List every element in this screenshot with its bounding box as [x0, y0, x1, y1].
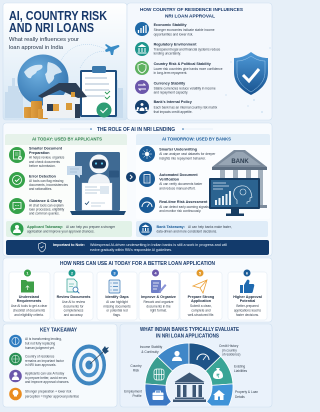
item: country risk and political stability	[135, 61, 223, 75]
label: existing liabilities: Liabilities	[234, 369, 248, 373]
icon: country globe	[154, 369, 164, 380]
step 2: review documents: and accuracy.	[64, 313, 83, 317]
item: guidance and clarity: Guidance & Clarity	[29, 199, 63, 203]
icon: briefcase	[152, 391, 164, 400]
item: country risk and political stability: in long-term repayment.	[154, 71, 187, 75]
label: credit history: (in country	[222, 348, 237, 352]
item: automated document verification: and reduce manual effort.	[159, 186, 196, 190]
step 1: understand requirements: Requirements	[17, 299, 41, 303]
step 6: higher approval potential: applications lead to	[234, 308, 261, 312]
item: automated document verification: AI can verify documents faster	[159, 182, 203, 186]
title: AND NRI LOANS	[9, 21, 94, 35]
label: country risk: Risk	[133, 368, 140, 372]
icon: credit gauge	[197, 354, 209, 360]
label: property and loan details: Property & Loan	[235, 390, 258, 394]
step 5: prepare strong application: Application	[191, 299, 212, 303]
takeaway: stronger preparation	[9, 388, 79, 400]
callout: important to note: Widespread AI-driven underwriting in Indian banks is still a work in progress and will	[90, 243, 227, 247]
takeaway: AI is transforming lending: AI is transforming lending,	[25, 337, 62, 341]
takeaway: applicants can use AI: to prepare better, avoid errors	[25, 376, 67, 380]
icon: airplane and flight path	[60, 44, 119, 68]
takeaway: country of residence: remains an important factor	[25, 359, 65, 363]
heading: WHAT INDIAN BANKS TYPICALLY EVALUATE	[140, 327, 239, 333]
step 5: prepare strong application: well-structured file.	[188, 313, 214, 317]
item: smarter underwriting: Smarter Underwriting	[159, 147, 197, 151]
heading: HOW NRIS CAN USE AI TODAY FOR A BETTER LOAN APPLICATION	[60, 261, 215, 267]
item: guidance and clarity	[9, 198, 65, 216]
step 3: identify gaps: AI can highlight	[106, 300, 128, 304]
icon: target with arrow	[72, 344, 109, 386]
item: economic stability: Economic Stability	[154, 23, 188, 27]
icon: income person	[172, 351, 182, 361]
item: guidance and clarity: loan processes, eligibility	[29, 208, 65, 212]
step 5: prepare strong application: Submit a clean,	[190, 304, 212, 308]
step 6: higher approval potential: Higher Approval	[233, 295, 262, 299]
title: AI, COUNTRY RISK	[9, 9, 107, 23]
subtitle: What really influences your	[9, 37, 79, 43]
item: smarter document preparation: and check documents	[29, 160, 60, 164]
item: smarter underwriting: AI can analyze vast datasets for deeper	[159, 152, 216, 156]
label: property and loan details: Details	[235, 395, 245, 399]
item: error detection: AI tools can flag missing	[29, 179, 64, 183]
step 6: higher approval potential	[228, 270, 267, 320]
step 4: improve and organize: Rework and organize	[143, 300, 174, 304]
subheading: AI TOMORROW: USED BY BANKS	[162, 136, 232, 142]
callout: bank takeaway: Bank Takeaway:	[156, 225, 185, 229]
step 1: understand requirements: Understand	[19, 295, 40, 299]
icon: house	[213, 390, 225, 400]
item: bank internal policy: Each bank has an internal country risk matrix	[154, 106, 218, 110]
label: income stability: & Continuity	[141, 350, 159, 354]
item: smarter underwriting: insights into repayment behavior.	[159, 156, 206, 160]
step 6: higher approval potential: Better-prepared	[236, 304, 259, 308]
takeaway: country of residence: Country of residence	[25, 354, 55, 358]
icon: bank with AI monitor: BANK	[231, 159, 249, 165]
item: error detection: and rationalities.	[29, 187, 52, 191]
step 2: review documents: Use AI to review	[62, 300, 86, 304]
label: income stability	[140, 345, 163, 354]
title	[9, 9, 107, 35]
item: country risk and political stability: Country Risk & Political Stability	[154, 62, 212, 66]
item: economic stability: opportunities and lower risk.	[154, 32, 193, 36]
step 4: improve and organize: 4	[154, 270, 157, 276]
step 3: identify gaps: Identify Gaps	[105, 295, 129, 299]
step 2: review documents	[54, 270, 93, 320]
step 4: improve and organize: Improve & Organize	[141, 295, 176, 299]
item: real-time risk assessment	[139, 197, 209, 213]
step 5: prepare strong application	[180, 270, 222, 320]
subtitle: loan approval in India	[9, 45, 63, 51]
item: real-time risk assessment: AI can detect early-warning signals	[159, 205, 209, 209]
subheading: AI TODAY: USED BY APPLICANTS	[32, 136, 103, 142]
callout: important to note: Important to Note:	[53, 243, 85, 247]
icon: shield with check	[226, 48, 270, 113]
step 1: understand requirements: and eligibility criteria.	[14, 313, 44, 317]
item: bank internal policy	[135, 100, 218, 114]
item: currency stability: and repayment capacity.	[154, 90, 188, 94]
takeaway: AI is transforming lending: human judgment yet.	[25, 346, 55, 350]
label: employment profile: Employment	[124, 390, 142, 394]
step 2: review documents: Review Documents	[57, 295, 90, 299]
callout: bank takeaway	[136, 221, 268, 237]
heading	[140, 327, 239, 339]
step 4: improve and organize: right format.	[150, 308, 167, 312]
item: automated document verification	[139, 171, 203, 190]
takeaway: applicants can use AI: Applicants can use AI today	[25, 372, 65, 376]
panel: what Indian banks typically evaluate	[120, 324, 272, 412]
callout: bank takeaway: AI can help banks make faster,	[188, 225, 232, 229]
callout: applicant takeaway: Applicant Takeaway:	[27, 225, 63, 229]
callout: bank takeaway: data-driven and more consistent decisions.	[156, 230, 217, 234]
label: existing liabilities: Existing	[234, 364, 245, 368]
item: regulatory environment	[135, 42, 221, 56]
label: existing liabilities	[234, 364, 248, 373]
heading: IN NRI LOAN APPLICATIONS	[156, 333, 219, 339]
label: country risk: Country	[130, 364, 142, 368]
item: smarter document preparation: Smarter Document	[29, 146, 63, 150]
item: regulatory environment: lending uncertainty.	[154, 52, 181, 56]
step 5: prepare strong application: 5	[199, 270, 202, 276]
label: credit history: of residence)	[222, 352, 240, 356]
step 6: higher approval potential: faster decisions.	[236, 313, 259, 317]
item: error detection: documents, inconsistencies	[29, 183, 68, 187]
icon: house	[38, 83, 87, 118]
item: smarter document preparation: before submission.	[29, 164, 56, 168]
item: country risk and political stability: Lower risk countries give banks more confidence	[154, 67, 223, 71]
item: smarter underwriting	[139, 146, 216, 162]
item: error detection: Error Detection	[29, 174, 57, 178]
callout: applicant takeaway: application and improve your approval chances.	[27, 230, 95, 234]
item: guidance and clarity: AI chat tools can explain	[29, 204, 64, 208]
takeaway: applicants can use AI	[9, 370, 69, 384]
step 3: identify gaps: flags.	[113, 313, 121, 317]
panel: AI tomorrow used by banks	[136, 134, 270, 219]
item: real-time risk assessment: Real-time Risk Assessment	[159, 200, 208, 204]
step 1: understand requirements: Use AI tools to get a clear	[11, 304, 48, 308]
icon: money bag: ₹	[216, 374, 220, 380]
step 1: understand requirements: 1	[26, 270, 29, 276]
heading	[140, 7, 243, 18]
item: economic stability: Stronger economies indicate stable income	[154, 28, 215, 32]
callout: applicant takeaway	[6, 221, 132, 237]
panel: how NRIs can use AI today	[3, 258, 272, 322]
panel: hero title	[3, 3, 127, 120]
step 6: higher approval potential: 6	[246, 270, 249, 276]
panel: how country of residence influences approval	[127, 3, 272, 120]
takeaway: country of residence	[9, 353, 65, 367]
callout: important to note	[6, 240, 269, 255]
item: economic stability	[135, 22, 215, 36]
label: credit history	[219, 344, 240, 356]
item: smarter document preparation: Preparation	[29, 151, 50, 155]
panel: AI today used by applicants	[5, 134, 127, 219]
takeaway: applicants can use AI: and improve approval chances.	[25, 380, 69, 384]
item: smarter document preparation: AI helps review, organize	[29, 156, 65, 160]
item: smarter document preparation	[9, 146, 65, 168]
label: employment profile: Profile	[132, 394, 142, 398]
takeaway: AI is transforming lending	[9, 335, 62, 350]
item: real-time risk assessment: and monitor risk continuously.	[159, 209, 201, 213]
icon: globe	[18, 54, 68, 106]
step 6: higher approval potential: Potential	[240, 299, 255, 303]
step 4: improve and organize	[139, 270, 179, 320]
step 2: review documents: completeness	[64, 308, 84, 312]
panel: the role of AI in NRI lending	[3, 123, 272, 256]
item: currency stability: Stable currencies reduce volatility in income	[154, 86, 216, 90]
heading: HOW COUNTRY OF RESIDENCE INFLUENCES	[140, 7, 243, 12]
step 2: review documents: documents for	[63, 304, 85, 308]
panel: key takeaway	[3, 324, 117, 407]
callout: applicant takeaway: AI can help you prepare a stronger	[66, 225, 116, 229]
item: regulatory environment: Transparent legal and financial systems reduce	[154, 48, 221, 52]
icon: clipboard	[80, 66, 117, 117]
label: credit history: Credit History	[219, 344, 239, 348]
heading: THE ROLE OF AI IN NRI LENDING	[97, 127, 175, 133]
icon: green check badge	[96, 102, 112, 118]
item: currency stability: Currency Stability	[154, 82, 186, 86]
item: automated document verification: Verification	[159, 178, 180, 182]
label: property and loan details	[235, 390, 258, 399]
label: employment profile	[124, 390, 142, 398]
step 2: review documents: 2	[71, 270, 74, 276]
takeaway: stronger preparation: perception = higher approval potential.	[25, 394, 79, 398]
icon: central bank	[173, 372, 206, 402]
step 4: improve and organize: documents in the	[146, 304, 171, 308]
takeaway: country of residence: in NRI loan approvals.	[25, 363, 56, 367]
step 1: understand requirements: checklist of documents	[13, 308, 46, 312]
heading: NRI LOAN APPROVAL	[165, 14, 215, 18]
icon: money bag	[213, 368, 223, 380]
label: income stability: Income Stability	[140, 345, 163, 349]
icon: coins	[24, 101, 48, 119]
item: bank internal policy: Bank's Internal Policy	[154, 100, 193, 104]
item: automated document verification: Automated Document	[159, 173, 198, 177]
heading: KEY TAKEAWAY	[40, 328, 77, 334]
step 3: identify gaps: 3	[113, 270, 116, 276]
callout: important to note: evolve gradually within RBI's responsible AI guidelines.	[90, 248, 172, 252]
takeaway: stronger preparation: Stronger preparation + lower risk	[25, 390, 72, 394]
takeaway: AI is transforming lending: but not fully replacing	[25, 342, 55, 346]
item: regulatory environment: Regulatory Environment	[154, 42, 197, 46]
item: bank internal policy: that impacts credit appetite.	[154, 110, 193, 114]
step 1: understand requirements	[9, 270, 50, 320]
subtitle	[9, 37, 79, 51]
step 3: identify gaps: missing documents	[103, 304, 131, 308]
icon: robot on laptop	[67, 152, 126, 215]
icon: chevron connector	[126, 172, 136, 182]
item: currency stability	[135, 80, 216, 94]
chart: evaluation fan	[145, 343, 233, 412]
item: guidance and clarity: and common queries.	[29, 212, 60, 216]
step 5: prepare strong application: Prepare Strong	[188, 295, 214, 299]
label: country risk	[130, 364, 142, 372]
step 3: identify gaps	[97, 270, 137, 320]
item: error detection	[9, 172, 68, 191]
step 5: prepare strong application: complete and	[191, 308, 211, 312]
step 3: identify gaps: or potential red	[106, 308, 128, 312]
